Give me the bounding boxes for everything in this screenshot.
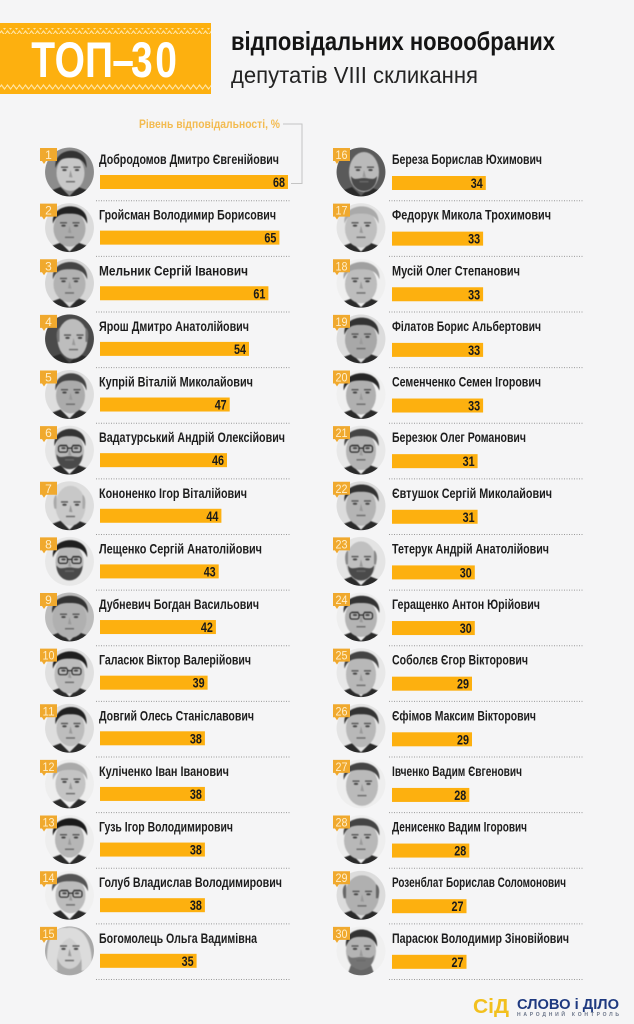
bar 9	[100, 620, 216, 635]
name 16: Береза Борислав Юхимович	[392, 152, 542, 167]
badge 20	[333, 371, 350, 387]
bar 10: 39	[193, 676, 205, 691]
avatar 9	[44, 592, 94, 642]
row 26	[333, 703, 584, 757]
badge 6: 6	[45, 426, 52, 440]
row 10	[40, 648, 291, 701]
badge 25: 25	[336, 649, 348, 663]
row 7	[40, 481, 291, 534]
row 14	[40, 870, 291, 924]
bar 1	[100, 175, 288, 190]
name 8: Лещенко Сергій Анатолійович	[99, 541, 262, 556]
avatar 10	[44, 648, 94, 698]
bar 2: 65	[264, 231, 277, 246]
logo: Слово і Діло: СЛОВО і ДІЛО	[517, 997, 619, 1013]
name 4: Ярош Дмитро Анатолійович	[99, 319, 249, 334]
badge 1	[40, 148, 57, 164]
row 19	[333, 314, 584, 368]
bar 21	[392, 454, 478, 469]
badge 21	[333, 426, 350, 442]
row 12	[40, 759, 291, 813]
badge 22	[333, 482, 350, 498]
bar 17	[392, 232, 483, 247]
bar 30: 27	[452, 955, 464, 970]
avatar 30	[336, 926, 386, 976]
row 23	[333, 536, 584, 590]
bar 14: 38	[190, 898, 202, 913]
row 11	[40, 703, 291, 757]
avatar 12	[52, 762, 88, 808]
bar 17: 33	[468, 232, 480, 247]
badge 2: 2	[45, 204, 52, 218]
badge 21: 21	[336, 426, 348, 440]
badge 25	[333, 649, 350, 665]
row 15	[40, 926, 291, 980]
row 22	[333, 481, 584, 534]
badge 14: 14	[42, 871, 55, 885]
bar 9: 42	[201, 620, 213, 635]
avatar 4	[44, 314, 94, 364]
bar 20	[392, 399, 483, 414]
name 3: Мельник Сергій Іванович	[99, 263, 248, 278]
bar 15: 35	[182, 954, 194, 969]
bar 7: 44	[206, 509, 219, 524]
row 20	[333, 370, 584, 423]
bar 22: 31	[463, 510, 475, 525]
avatar 28	[336, 815, 386, 865]
name 22: Євтушок Сергій Миколайович	[392, 486, 552, 501]
badge 15	[40, 927, 57, 943]
name 12: Куліченко Іван Іванович	[99, 764, 229, 779]
badge 5: 5	[45, 371, 52, 385]
badge 3: 3	[45, 259, 52, 273]
bar 28: 28	[454, 844, 467, 859]
badge 11: 11	[42, 704, 55, 718]
bar 5: 47	[215, 398, 227, 413]
avatar 24	[336, 592, 386, 642]
avatar 19	[336, 314, 386, 364]
name 18: Мусій Олег Степанович	[392, 263, 520, 278]
badge 27: 27	[336, 760, 348, 774]
badge 13: 13	[42, 816, 55, 830]
avatar 11	[44, 703, 94, 753]
avatar 17	[336, 203, 386, 253]
badge 8: 8	[45, 537, 52, 551]
bar 12: 38	[190, 787, 202, 802]
legend label with connector	[139, 119, 302, 184]
badge 18	[333, 259, 350, 275]
badge 30	[333, 927, 350, 943]
name 25: Соболєв Єгор Вікторович	[392, 653, 528, 668]
name 14: Голуб Владислав Володимирович	[99, 875, 282, 890]
badge 17	[333, 204, 350, 220]
badge 29: 29	[336, 871, 348, 885]
badge 19	[333, 315, 350, 331]
bar 27	[392, 788, 469, 803]
badge 9	[40, 593, 57, 609]
logo: Слово і Діло: НАРОДНИЙ КОНТРОЛЬ	[517, 1010, 619, 1018]
bar 6	[100, 453, 227, 468]
badge 26	[333, 704, 350, 720]
bar 25	[392, 677, 472, 692]
bar 25: 29	[457, 677, 469, 692]
badge 17: 17	[336, 204, 348, 218]
badge 24: 24	[336, 593, 348, 607]
badge 24	[333, 593, 350, 609]
badge 7	[40, 482, 57, 498]
badge 1: 1	[45, 148, 52, 162]
badge 3	[40, 259, 57, 275]
logo: СіД: СіД	[473, 996, 509, 1018]
avatar 21	[336, 425, 386, 475]
avatar 23	[336, 536, 386, 586]
bar 1: 68	[273, 175, 285, 190]
badge 14	[40, 871, 57, 887]
name 2: Гройсман Володимир Борисович	[99, 208, 276, 223]
avatar 14	[51, 872, 89, 920]
bar 29: 27	[452, 899, 464, 914]
heading: депутатів VIII скликання	[231, 62, 478, 88]
name 6: Вадатурський Андрій Олексійович	[99, 430, 285, 445]
name 20: Семенченко Семен Ігорович	[392, 375, 541, 390]
row 30	[333, 926, 584, 980]
title banner	[0, 23, 211, 94]
bar 23: 30	[460, 565, 472, 580]
avatar 20	[342, 372, 380, 419]
badge 23: 23	[336, 537, 348, 551]
bar 4: 54	[234, 342, 246, 357]
badge 6	[40, 426, 57, 442]
badge 30: 30	[336, 927, 348, 941]
bar 29	[392, 899, 466, 914]
badge 28: 28	[336, 816, 348, 830]
badge 18: 18	[336, 259, 348, 273]
avatar 29	[336, 870, 386, 920]
badge 16: 16	[336, 148, 348, 162]
badge 26: 26	[336, 704, 348, 718]
name 17: Федорук Микола Трохимович	[392, 208, 551, 223]
bar 20: 33	[468, 399, 480, 414]
avatar 7	[44, 481, 94, 531]
avatar 27	[336, 759, 386, 809]
bar 13: 38	[190, 843, 202, 858]
row 4	[40, 314, 291, 368]
avatar 3	[44, 258, 94, 308]
name 11: Довгий Олесь Станіславович	[99, 708, 254, 723]
badge 13	[40, 816, 57, 832]
row 29	[333, 870, 584, 924]
name 19: Філатов Борис Альбертович	[392, 319, 541, 334]
badge 8	[40, 537, 57, 553]
bar 7	[100, 509, 221, 524]
row 2	[40, 203, 291, 256]
bar 18: 33	[468, 287, 480, 302]
bar 27: 28	[454, 788, 467, 803]
bar 8	[100, 564, 219, 579]
avatar 25	[336, 648, 386, 698]
bar 26	[392, 732, 472, 747]
badge 15: 15	[42, 927, 55, 941]
avatar 26	[336, 703, 386, 753]
heading: відповідальних новообраних	[231, 26, 555, 56]
name 13: Гузь Ігор Володимирович	[99, 820, 233, 835]
bar 26: 29	[457, 732, 469, 747]
badge 22: 22	[336, 482, 348, 496]
badge 28	[333, 816, 350, 832]
bar 4	[100, 342, 249, 357]
badge 4	[40, 315, 57, 331]
name 9: Дубневич Богдан Васильович	[99, 597, 259, 612]
row 3	[40, 258, 291, 312]
badge 2	[40, 204, 57, 220]
row 13	[40, 815, 291, 868]
row 1	[40, 147, 291, 201]
badge 4: 4	[45, 315, 52, 329]
avatar 15	[44, 926, 94, 976]
name 24: Геращенко Антон Юрійович	[392, 597, 540, 612]
bar 10	[100, 676, 208, 691]
badge 7: 7	[45, 482, 52, 496]
avatar 16	[336, 147, 386, 197]
avatar 8	[44, 536, 94, 586]
badge 12	[40, 760, 57, 776]
bar 11	[100, 731, 205, 746]
name 27: Івченко Вадим Євгенович	[392, 764, 522, 779]
avatar 2	[44, 203, 94, 253]
badge 19: 19	[336, 315, 348, 329]
badge 12: 12	[42, 760, 55, 774]
row 24	[333, 592, 584, 646]
bar 19	[392, 343, 483, 358]
badge 16	[333, 148, 350, 164]
row 16	[333, 147, 584, 201]
bar 23	[392, 565, 475, 580]
bar 21: 31	[463, 454, 475, 469]
badge 9: 9	[45, 593, 52, 607]
bar 22	[392, 510, 478, 525]
badge 29	[333, 871, 350, 887]
bar 24: 30	[460, 621, 472, 636]
bar 24	[392, 621, 475, 636]
bar 2	[100, 231, 279, 246]
badge 10	[40, 649, 57, 665]
bar 16	[392, 176, 486, 191]
bar 11: 38	[190, 731, 202, 746]
title banner: ТОП–30	[31, 31, 177, 88]
row 9	[40, 592, 291, 646]
bar 3	[100, 286, 268, 301]
row 17	[333, 203, 584, 256]
badge 23	[333, 537, 350, 553]
row 21	[333, 425, 584, 479]
heading	[231, 26, 555, 88]
bar 30	[392, 955, 466, 970]
bar 19: 33	[468, 343, 480, 358]
bar 5	[100, 398, 230, 413]
badge 5	[40, 371, 57, 387]
name 21: Березюк Олег Романович	[392, 430, 526, 445]
bar 6: 46	[212, 453, 224, 468]
avatar 18	[342, 261, 380, 308]
row 5	[40, 370, 291, 423]
bar 13	[100, 843, 205, 858]
row 6	[40, 425, 291, 479]
name 26: Єфімов Максим Вікторович	[392, 708, 536, 723]
avatar 13	[52, 817, 88, 864]
name 5: Купрій Віталій Миколайович	[99, 375, 253, 390]
avatar 1	[44, 147, 94, 197]
row 28	[333, 815, 584, 868]
avatar 6	[44, 425, 94, 475]
name 15: Богомолець Ольга Вадимівна	[99, 931, 257, 946]
bar 8: 43	[204, 564, 216, 579]
avatar 5	[44, 370, 94, 420]
bar 15	[100, 954, 197, 969]
bar 28	[392, 844, 469, 859]
name 10: Галасюк Віктор Валерійович	[99, 653, 251, 668]
badge 20: 20	[336, 371, 348, 385]
name 29: Розенблат Борислав Соломонович	[392, 875, 566, 890]
bar 3: 61	[253, 286, 266, 301]
bar 12	[100, 787, 205, 802]
name 1: Добродомов Дмитро Євгенійович	[99, 152, 279, 167]
row 18	[333, 258, 584, 312]
legend label with connector: Рівень відповідальності, %	[139, 119, 280, 131]
badge 11	[40, 704, 57, 720]
row 25	[333, 648, 584, 701]
bar 14	[100, 898, 205, 913]
row 27	[333, 759, 584, 813]
name 28: Денисенко Вадим Ігорович	[392, 820, 527, 835]
bar 16: 34	[471, 176, 483, 191]
name 23: Тетерук Андрій Анатолійович	[392, 541, 549, 556]
row 8	[40, 536, 291, 590]
avatar 22	[336, 481, 386, 531]
badge 10: 10	[42, 649, 55, 663]
bar 18	[392, 287, 483, 302]
name 7: Кононенко Ігор Віталійович	[99, 486, 247, 501]
name 30: Парасюк Володимир Зіновійович	[392, 931, 569, 946]
badge 27	[333, 760, 350, 776]
